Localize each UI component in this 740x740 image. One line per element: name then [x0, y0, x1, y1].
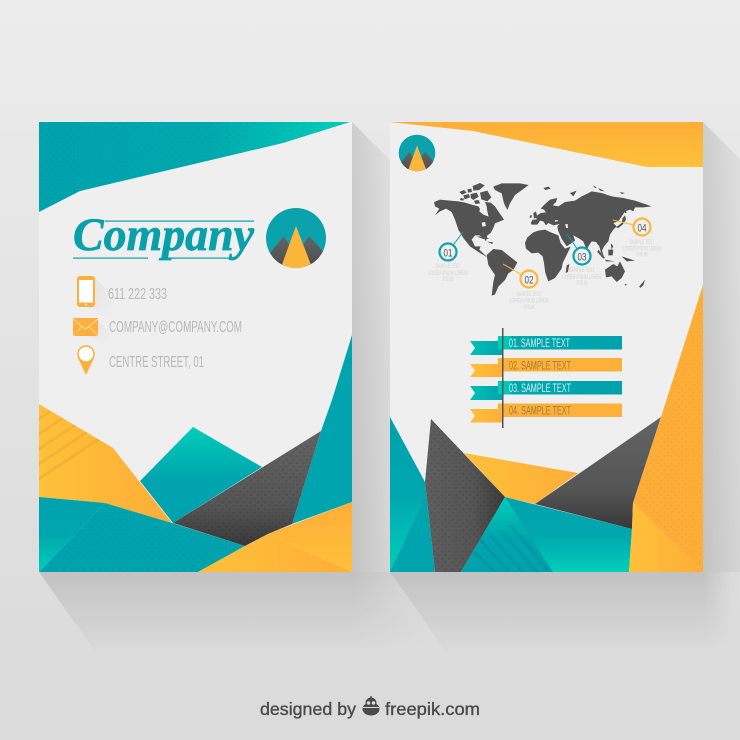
ribbon 04: [470, 404, 622, 422]
teal bottom shape: [39, 497, 245, 572]
marker 01: IPSUM: [442, 277, 454, 283]
orange bottom shape: [198, 502, 352, 572]
ribbon 03: 03. SAMPLE TEXT: [509, 383, 571, 395]
street address: CENTRE STREET, 01: [109, 354, 204, 371]
marker 04: SAMPLE TEXT: [630, 240, 655, 246]
freepik credit: designed by: [260, 699, 356, 719]
company logo: [266, 208, 327, 270]
ribbon 04: 04. SAMPLE TEXT: [509, 406, 571, 418]
icon: phone: [77, 276, 112, 318]
ribbon list: [470, 328, 622, 428]
ribbon 03: [470, 381, 622, 400]
panel: right flyer: [390, 122, 703, 575]
marker 02: 02: [524, 274, 534, 286]
ribbon 01: 01. SAMPLE TEXT: [509, 338, 570, 350]
freepik credit: [260, 696, 480, 719]
orange left shape: [30, 404, 172, 523]
ribbon 02: 02. SAMPLE TEXT: [509, 360, 571, 372]
phone number: 611 222 333: [108, 286, 167, 303]
right teal shape: [292, 335, 352, 524]
world map: [434, 183, 652, 296]
email address: COMPANY@COMPANY.COM: [109, 319, 242, 336]
top orange shape: [390, 122, 703, 167]
marker 02: [503, 264, 548, 311]
marker 01: 01: [444, 248, 452, 260]
dark dotted shape: [173, 431, 321, 546]
marker 03: 03: [578, 252, 586, 264]
marker 03: IPSUM: [576, 281, 588, 287]
marker 02: IPSUM: [524, 305, 534, 311]
ribbon 02: [470, 358, 622, 377]
small logo: [399, 135, 436, 173]
dark left shape: [425, 419, 505, 572]
marker 02: LOREM IPSUM LOREM: [510, 298, 548, 304]
page sheet: [39, 122, 352, 572]
orange center shape: [464, 453, 578, 504]
marker 03: LOREM IPSUM LOREM: [562, 275, 602, 281]
marker 03: [562, 234, 602, 287]
company wordmark: Company: [73, 209, 254, 261]
marker 01: LOREM IPSUM LOREM: [428, 271, 468, 277]
marker 04: IPSUM: [636, 252, 648, 258]
marker 04: 04: [638, 222, 646, 234]
teal left shape: [390, 417, 435, 572]
panel: left flyer: [30, 122, 352, 572]
marker 02: SAMPLE TEXT: [516, 292, 542, 298]
icon: freepik mascot: [362, 696, 380, 716]
marker 03: SAMPLE TEXT: [570, 268, 595, 274]
icon: map pin: [78, 346, 94, 375]
orange right shape: [629, 285, 703, 572]
top teal shape: [39, 122, 350, 212]
long shadows: [39, 122, 740, 654]
dark right shape: [535, 417, 661, 529]
teal center shape: [461, 497, 632, 575]
freepik credit: freepik.com: [385, 699, 480, 719]
marker 04: LOREM IPSUM LOREM: [622, 246, 662, 252]
page sheet: [390, 122, 703, 572]
marker 01: [428, 232, 468, 283]
marker 04: [613, 218, 662, 258]
center teal diamond: [140, 427, 262, 523]
marker 01: SAMPLE TEXT: [436, 264, 461, 270]
ribbon 01: [470, 336, 622, 355]
ribbon spine: [502, 328, 504, 428]
icon: envelope: [73, 318, 108, 346]
